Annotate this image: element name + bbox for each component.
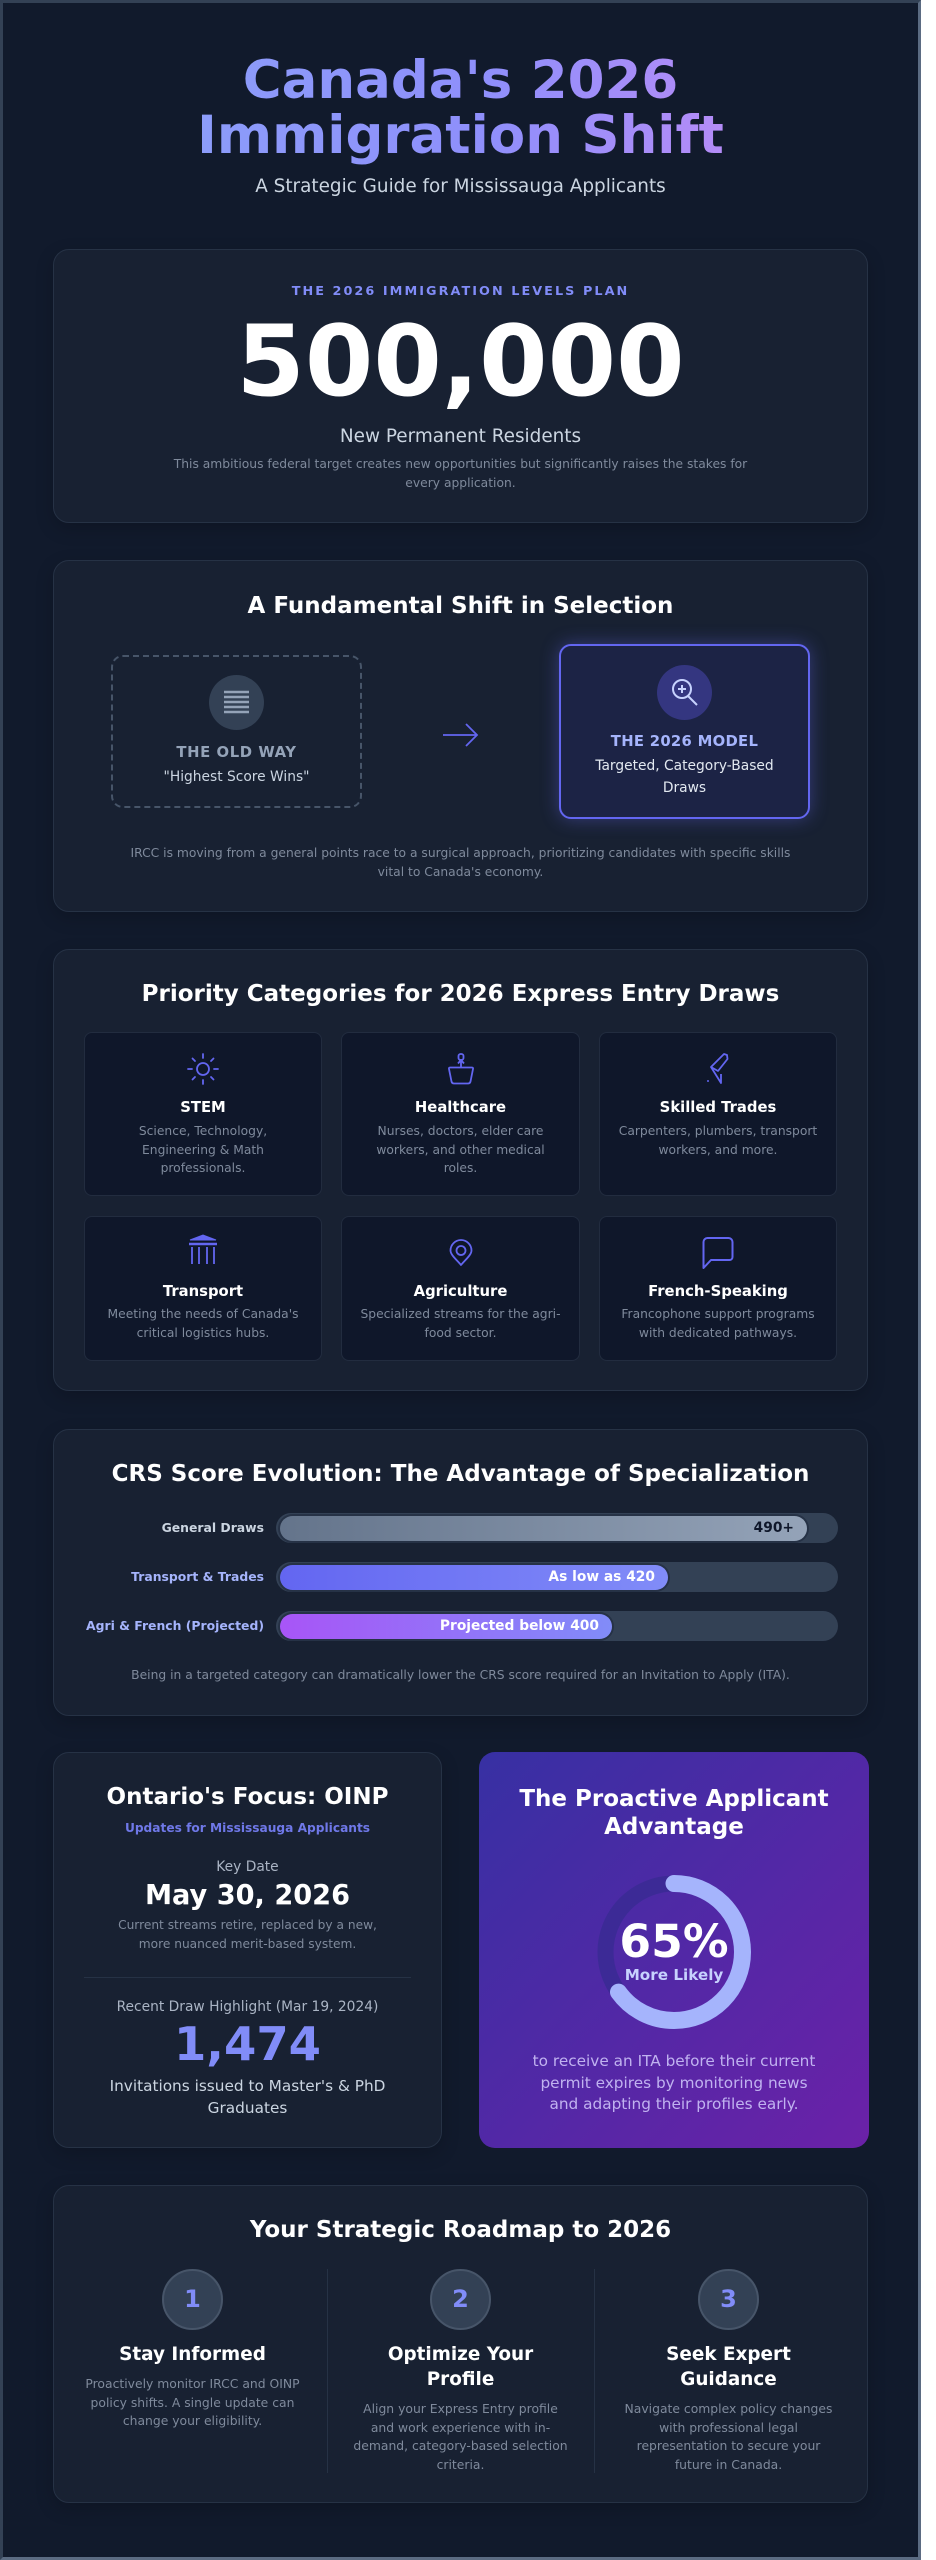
description: vital to Canada's economy.: [378, 865, 543, 879]
description: every application.: [405, 476, 516, 490]
heading: The Proactive Applicant: [519, 1786, 829, 1812]
step text: Proactively monitor IRCC and OINP: [85, 2377, 300, 2391]
draw number: 1,474: [174, 2017, 321, 2071]
arrow: [443, 723, 478, 747]
bar: [276, 1562, 838, 1592]
card text: [360, 1307, 561, 1340]
card: Transport: [84, 1216, 322, 1361]
step text: [625, 2402, 832, 2472]
card title: STEM: [180, 1099, 226, 1116]
panel: roadmap: [53, 2185, 868, 2503]
heading: A Fundamental Shift in Selection: [248, 593, 673, 619]
step text: representation to secure your: [637, 2439, 820, 2453]
card: STEM: [84, 1032, 322, 1196]
panel: proactive applicant: [479, 1752, 869, 2148]
step text: [85, 2377, 300, 2428]
donut label: More Likely: [625, 1966, 723, 1984]
title: Canada's 2026: [243, 50, 678, 111]
card: Agriculture: [341, 1216, 580, 1361]
subtitle: A Strategic Guide for Mississauga Applicants: [255, 176, 666, 197]
divider: [84, 1977, 411, 1978]
card text: Meeting the needs of Canada's: [108, 1307, 298, 1321]
bar: [276, 1513, 838, 1543]
key date text: more nuanced merit-based system.: [139, 1936, 356, 1950]
icon: pen: [707, 1053, 728, 1084]
heading: Your Strategic Roadmap to 2026: [250, 2217, 671, 2243]
card text: Francophone support programs: [621, 1307, 815, 1321]
draw text: Invitations issued to Master's & PhD: [110, 2077, 385, 2095]
step title: [388, 2344, 534, 2390]
heading: CRS Score Evolution: The Advantage of Specialization: [112, 1461, 809, 1487]
card title: French-Speaking: [648, 1283, 788, 1300]
bar label: General Draws: [162, 1520, 264, 1535]
bar label: Agri & French (Projected): [86, 1618, 264, 1633]
step text: change your eligibility.: [123, 2414, 262, 2428]
card text: critical logistics hubs.: [137, 1326, 269, 1340]
panel: 500,000 target: [53, 249, 868, 523]
number badge: 1: [184, 2285, 201, 2313]
old way label: THE OLD WAY: [176, 744, 297, 761]
model text: Targeted, Category-Based: [595, 758, 774, 774]
bar row: agri and french: [86, 1611, 838, 1641]
description: [131, 846, 790, 879]
bar: As low as 420: [548, 1569, 655, 1585]
step title: Optimize Your: [388, 2344, 533, 2365]
step text: criteria.: [437, 2458, 484, 2472]
icon: vase: [448, 1053, 474, 1084]
card text: with dedicated pathways.: [639, 1326, 797, 1340]
number badge: [162, 2269, 223, 2330]
step text: [353, 2402, 568, 2472]
card title: Transport: [163, 1283, 243, 1300]
description: to receive an ITA before their current: [533, 2052, 815, 2070]
step 2: [353, 2269, 568, 2472]
card: Healthcare: [341, 1032, 580, 1196]
model text: Draws: [663, 780, 706, 796]
description: This ambitious federal target creates new opportunities but significantly raises the stakes for: [174, 457, 747, 471]
key date label: Key Date: [216, 1859, 279, 1875]
icon: magnifier: [657, 665, 712, 720]
icon: sun: [187, 1053, 219, 1085]
card text: [376, 1124, 545, 1175]
step 1: [85, 2269, 300, 2428]
donut value: 65%: [619, 1915, 729, 1968]
subheading: Updates for Mississauga Applicants: [125, 1821, 370, 1835]
heading: Ontario's Focus: OINP: [107, 1784, 388, 1810]
number badge: 2: [452, 2285, 469, 2313]
step text: Navigate complex policy changes: [625, 2402, 832, 2416]
new model box: [559, 644, 810, 819]
bar: Projected below 400: [440, 1618, 599, 1634]
card text: Carpenters, plumbers, transport: [619, 1124, 817, 1138]
panel: CRS score chart: [53, 1429, 868, 1716]
card: Skilled Trades: [599, 1032, 837, 1196]
card title: Agriculture: [414, 1283, 507, 1300]
big number caption: New Permanent Residents: [340, 426, 581, 447]
header: [197, 50, 724, 197]
heading: Advantage: [604, 1814, 744, 1840]
title: Immigration Shift: [197, 105, 724, 166]
card text: Nurses, doctors, elder care: [378, 1124, 543, 1138]
bar row: general draws: [162, 1513, 838, 1543]
step text: with professional legal: [659, 2421, 798, 2435]
panel: priority categories: [53, 949, 868, 1391]
card text: workers, and more.: [658, 1142, 777, 1156]
card title: Skilled Trades: [660, 1099, 776, 1116]
bar: 490+: [754, 1520, 794, 1536]
card text: [139, 1124, 267, 1175]
card title: Healthcare: [415, 1099, 506, 1116]
step title: Seek Expert: [666, 2344, 791, 2365]
step text: Align your Express Entry profile: [363, 2402, 558, 2416]
draw text: Graduates: [208, 2098, 287, 2116]
icon: chat bubble: [702, 1237, 734, 1269]
card text: roles.: [444, 1161, 477, 1175]
step text: and work experience with in-: [371, 2421, 550, 2435]
icon: map pin: [450, 1239, 472, 1266]
model label: THE 2026 MODEL: [611, 733, 758, 750]
card text: [621, 1307, 815, 1340]
step title: Stay Informed: [119, 2344, 266, 2365]
model text: [595, 758, 774, 796]
step text: demand, category-based selection: [353, 2439, 568, 2453]
step 3: [625, 2269, 832, 2472]
card text: [108, 1307, 298, 1340]
draw label: Recent Draw Highlight (Mar 19, 2024): [117, 1999, 378, 2015]
panel: fundamental shift: [53, 560, 868, 912]
donut chart 65%: [598, 1875, 751, 2029]
old way box: [111, 655, 362, 808]
card: French-Speaking: [599, 1216, 837, 1361]
bar: [276, 1611, 838, 1641]
card text: workers, and other medical: [376, 1142, 545, 1156]
description: and adapting their profiles early.: [549, 2095, 799, 2113]
step text: future in Canada.: [675, 2458, 782, 2472]
description: permit expires by monitoring news: [540, 2074, 808, 2092]
icon: list lines: [209, 675, 264, 730]
card text: food sector.: [424, 1326, 496, 1340]
draw text: [110, 2077, 385, 2116]
card text: Engineering & Math: [142, 1142, 264, 1156]
step text: policy shifts. A single update can: [91, 2396, 294, 2410]
description: [533, 2052, 815, 2113]
panel: OINP: [53, 1752, 442, 2148]
step title: Guidance: [680, 2369, 777, 2390]
card text: [619, 1124, 817, 1156]
heading: Priority Categories for 2026 Express Entry Draws: [142, 981, 779, 1007]
key date text: Current streams retire, replaced by a new,: [118, 1918, 377, 1932]
number badge: 3: [720, 2285, 737, 2313]
number badge: [698, 2269, 759, 2330]
number badge: [430, 2269, 491, 2330]
step title: Profile: [427, 2369, 494, 2390]
description: IRCC is moving from a general points race to a surgical approach, prioritizing candidates with specific skills: [131, 846, 790, 860]
eyebrow label: THE 2026 IMMIGRATION LEVELS PLAN: [292, 284, 629, 299]
old way text: "Highest Score Wins": [163, 769, 310, 785]
card text: professionals.: [161, 1161, 245, 1175]
card text: Science, Technology,: [139, 1124, 267, 1138]
bar label: Transport & Trades: [131, 1569, 264, 1584]
heading: [519, 1786, 829, 1840]
bar row: transport and trades: [131, 1562, 838, 1592]
description: [174, 457, 748, 490]
key date: May 30, 2026: [145, 1880, 350, 1911]
key date text: [118, 1918, 377, 1950]
chart note: Being in a targeted category can dramatically lower the CRS score required for an Invitation to Apply (ITA).: [131, 1668, 790, 1682]
card text: Specialized streams for the agri-: [360, 1307, 561, 1321]
big number: 500,000: [236, 305, 685, 419]
icon: columns: [189, 1234, 217, 1264]
step title: [666, 2344, 791, 2390]
title: [197, 50, 724, 166]
